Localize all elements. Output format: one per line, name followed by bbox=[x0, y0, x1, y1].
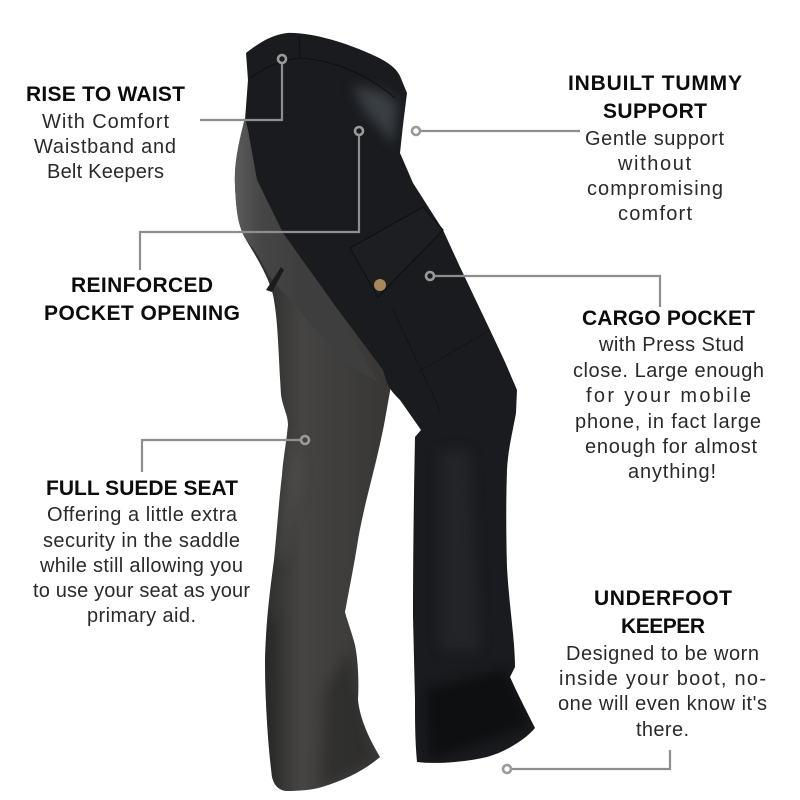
text: cargo pocket: anything! bbox=[628, 461, 716, 483]
text: inbuilt tummy support: comfort bbox=[618, 203, 692, 225]
text: reinforced pocket opening: REINFORCED bbox=[71, 274, 213, 297]
trousers photo bbox=[235, 33, 535, 791]
text: cargo pocket: CARGO POCKET bbox=[582, 307, 755, 330]
text: rise to waist: With Comfort bbox=[42, 111, 169, 133]
text: rise to waist bbox=[26, 83, 185, 183]
callout: reinforced pocket opening bbox=[140, 127, 363, 270]
text: reinforced pocket opening: POCKET OPENING bbox=[44, 302, 240, 325]
text: underfoot keeper: one will even know it's bbox=[558, 693, 767, 715]
front leg shading bbox=[352, 85, 530, 760]
text: full suede seat: primary aid. bbox=[87, 605, 196, 627]
text: inbuilt tummy support: SUPPORT bbox=[603, 100, 707, 123]
text: inbuilt tummy support: Gentle support bbox=[585, 128, 724, 150]
callout: full suede seat bbox=[142, 436, 309, 472]
back leg with suede seat bbox=[235, 118, 392, 791]
callout: rise to waist bbox=[200, 55, 286, 120]
text: underfoot keeper: inside your boot, no- bbox=[559, 668, 766, 690]
text: underfoot keeper bbox=[558, 587, 767, 741]
text: rise to waist: Belt Keepers bbox=[47, 161, 164, 183]
cargo pocket flap bbox=[350, 207, 443, 297]
suede seat panel bbox=[235, 118, 378, 382]
text: rise to waist: Waistband and bbox=[34, 136, 176, 158]
text: underfoot keeper: Designed to be worn bbox=[566, 643, 759, 665]
press stud bbox=[374, 279, 386, 291]
text: inbuilt tummy support: without bbox=[617, 153, 691, 175]
text: cargo pocket: with Press Stud bbox=[598, 334, 744, 356]
text: cargo pocket: close. Large enough bbox=[573, 360, 764, 382]
text: underfoot keeper: KEEPER bbox=[621, 615, 705, 638]
text: inbuilt tummy support bbox=[568, 72, 742, 225]
text: underfoot keeper: there. bbox=[636, 719, 689, 741]
text: cargo pocket: enough for almost bbox=[585, 436, 757, 458]
text: inbuilt tummy support: compromising bbox=[587, 178, 723, 200]
crotch crease bbox=[266, 267, 284, 292]
text: rise to waist: RISE TO WAIST bbox=[26, 83, 185, 106]
text: cargo pocket: phone, in fact large bbox=[575, 411, 761, 433]
text: reinforced pocket opening bbox=[44, 274, 240, 325]
text: underfoot keeper: UNDERFOOT bbox=[594, 587, 732, 610]
text: full suede seat: FULL SUEDE SEAT bbox=[46, 477, 238, 500]
text: full suede seat: Offering a little extra bbox=[47, 504, 238, 526]
text: full suede seat: security in the saddle bbox=[43, 530, 240, 552]
text: full suede seat bbox=[33, 477, 250, 627]
text: inbuilt tummy support: INBUILT TUMMY bbox=[568, 72, 742, 95]
callout: inbuilt tummy support bbox=[412, 127, 580, 135]
back leg fold shading bbox=[265, 464, 372, 788]
front leg bbox=[245, 33, 535, 763]
callout: underfoot keeper bbox=[503, 750, 670, 773]
text: full suede seat: while still allowing you bbox=[39, 555, 243, 577]
waistband and seams bbox=[250, 36, 490, 410]
text: cargo pocket: for your mobile bbox=[586, 385, 751, 407]
callout: cargo pocket bbox=[426, 272, 660, 307]
text: full suede seat: to use your seat as your bbox=[33, 580, 250, 602]
text: cargo pocket bbox=[573, 307, 764, 483]
